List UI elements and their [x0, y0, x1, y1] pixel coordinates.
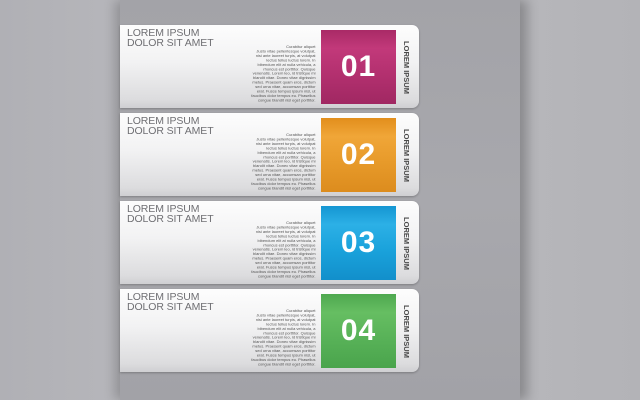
- card 3 body text: metus. Praesent quam eros, dictum: [253, 256, 316, 261]
- card 4 heading: LOREM IPSUM: [127, 291, 199, 303]
- card 1 body text: erat. Fusce tempus ipsum nisl, ut: [257, 89, 316, 94]
- card 1 body text: rhoncus est porttitor. Quisque: [264, 67, 316, 71]
- card 4 heading: DOLOR SIT AMET: [127, 301, 214, 313]
- card 4: [120, 289, 419, 372]
- card 4 body text: metus. Praesent quam eros, dictum: [253, 344, 316, 349]
- card 1 body text: congue blandit nisl eget porttitor.: [258, 98, 316, 102]
- card 4 body text: [251, 308, 316, 366]
- card 2 heading: LOREM IPSUM: [127, 115, 199, 127]
- card 1 heading: [127, 27, 214, 49]
- card 1 body text: venenatis. Lorem leo, id tristique mi: [253, 71, 316, 76]
- card 2 body text: blandit vitae. Donec vitae dignissim: [254, 164, 316, 168]
- card 3 body text: sed urna vitae, accumsan porttitor: [256, 261, 316, 265]
- card 1 body text: [251, 44, 316, 102]
- card 3 body text: lectus tellus luctus lorem. In: [267, 234, 316, 238]
- number box 02: [321, 118, 396, 192]
- card 2 heading: DOLOR SIT AMET: [127, 125, 214, 137]
- number box 04: [321, 294, 396, 368]
- card 3 body text: faucibus dolor tempus eu. Phasellus: [252, 269, 316, 274]
- card 3 heading: [127, 203, 214, 225]
- card 1 body text: Justo vitae pellentesque volutpat,: [257, 49, 316, 53]
- card 3 heading: DOLOR SIT AMET: [127, 213, 214, 225]
- card 2 body text: metus. Praesent quam eros, dictum: [253, 168, 316, 173]
- card 3 body text: venenatis. Lorem leo, id tristique mi: [253, 247, 316, 252]
- number box 02: 02: [341, 138, 376, 171]
- card 4 body text: Justo vitae pellentesque volutpat,: [257, 313, 316, 317]
- card 3 body text: congue blandit nisl eget porttitor.: [258, 274, 316, 278]
- card 3 body text: erat. Fusce tempus ipsum nisl, ut: [257, 265, 316, 270]
- card 4 body text: blandit vitae. Donec vitae dignissim: [254, 340, 316, 344]
- card 4 body text: Curabitur aliquet: [287, 308, 316, 313]
- number box 01: 01: [341, 50, 376, 83]
- card 3 body text: nisi ante laoreet turpis, at volutpat: [256, 229, 316, 234]
- card 3 heading: LOREM IPSUM: [127, 203, 199, 215]
- vertical label 3: LOREM IPSUM: [402, 217, 411, 269]
- card 4 body text: sed urna vitae, accumsan porttitor: [256, 349, 316, 353]
- card 3 body text: [251, 220, 316, 278]
- card 3 body text: Justo vitae pellentesque volutpat,: [257, 225, 316, 229]
- card 2 body text: sed urna vitae, accumsan porttitor: [256, 173, 316, 177]
- card 4 heading: [127, 291, 214, 313]
- card 4 body text: congue blandit nisl eget porttitor.: [258, 362, 316, 366]
- number box 01: [321, 30, 396, 104]
- card 1 body text: sed urna vitae, accumsan porttitor: [256, 85, 316, 89]
- card 1 body text: bibendum elit at nulla vehicula, a: [258, 62, 316, 67]
- card 1 body text: lectus tellus luctus lorem. In: [267, 58, 316, 62]
- card 4 body text: nisi ante laoreet turpis, at volutpat: [256, 317, 316, 322]
- card 3 body text: rhoncus est porttitor. Quisque: [264, 243, 316, 247]
- card 2 body text: venenatis. Lorem leo, id tristique mi: [253, 159, 316, 164]
- card 1 heading: LOREM IPSUM: [127, 27, 199, 39]
- card 2 body text: bibendum elit at nulla vehicula, a: [258, 150, 316, 155]
- card 1 body text: blandit vitae. Donec vitae dignissim: [254, 76, 316, 80]
- card 1 body text: nisi ante laoreet turpis, at volutpat: [256, 53, 316, 58]
- card 2 heading: [127, 115, 214, 137]
- card 2 body text: [251, 132, 316, 190]
- card 2 body text: Curabitur aliquet: [287, 132, 316, 137]
- card 2 body text: nisi ante laoreet turpis, at volutpat: [256, 141, 316, 146]
- card 2 body text: lectus tellus luctus lorem. In: [267, 146, 316, 150]
- card 4 body text: bibendum elit at nulla vehicula, a: [258, 326, 316, 331]
- card 3 body text: bibendum elit at nulla vehicula, a: [258, 238, 316, 243]
- number box 04: 04: [341, 314, 376, 347]
- number box 03: 03: [341, 226, 376, 259]
- card 2 body text: faucibus dolor tempus eu. Phasellus: [252, 181, 316, 186]
- vertical label 2: LOREM IPSUM: [402, 129, 411, 181]
- card 2 body text: erat. Fusce tempus ipsum nisl, ut: [257, 177, 316, 182]
- card 2 body text: rhoncus est porttitor. Quisque: [264, 155, 316, 159]
- vertical label 4: LOREM IPSUM: [402, 305, 411, 357]
- card 1 body text: metus. Praesent quam eros, dictum: [253, 80, 316, 85]
- number box 03: [321, 206, 396, 280]
- card 1 body text: Curabitur aliquet: [287, 44, 316, 49]
- card 4 body text: faucibus dolor tempus eu. Phasellus: [252, 357, 316, 362]
- card 4 body text: erat. Fusce tempus ipsum nisl, ut: [257, 353, 316, 358]
- card 1 body text: faucibus dolor tempus eu. Phasellus: [252, 93, 316, 98]
- card 4 body text: rhoncus est porttitor. Quisque: [264, 331, 316, 335]
- card 3 body text: blandit vitae. Donec vitae dignissim: [254, 252, 316, 256]
- card 2: [120, 113, 419, 196]
- card 3: [120, 201, 419, 284]
- card 1: [120, 25, 419, 108]
- background panel: [120, 0, 520, 400]
- card 2 body text: congue blandit nisl eget porttitor.: [258, 186, 316, 190]
- card 1 heading: DOLOR SIT AMET: [127, 37, 214, 49]
- card 4 body text: venenatis. Lorem leo, id tristique mi: [253, 335, 316, 340]
- card 4 body text: lectus tellus luctus lorem. In: [267, 322, 316, 326]
- vertical label 1: LOREM IPSUM: [402, 41, 411, 93]
- card 3 body text: Curabitur aliquet: [287, 220, 316, 225]
- card 2 body text: Justo vitae pellentesque volutpat,: [257, 137, 316, 141]
